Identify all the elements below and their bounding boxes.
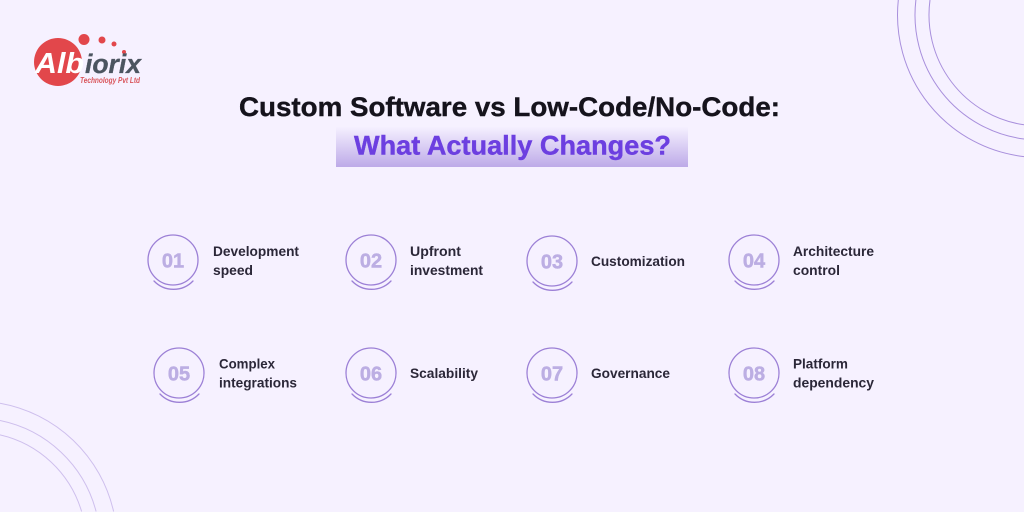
item 08: Platform dependency: dependency	[793, 374, 874, 390]
item 01: Development speed: 01	[162, 250, 184, 272]
decoration: top-right concentric arcs	[898, 0, 1024, 157]
item 07: Governance	[527, 348, 670, 402]
item 05: Complex integrations: integrations	[219, 374, 297, 390]
item 05: Complex integrations: 05	[168, 364, 190, 386]
item 03: Customization	[527, 236, 685, 290]
item 06: Scalability: 06	[360, 364, 382, 386]
item 01: Development speed	[148, 235, 299, 289]
subtitle banner	[336, 127, 688, 167]
item 03: Customization: 03	[541, 252, 563, 274]
item 02: Upfront investment: investment	[410, 262, 483, 278]
item 05: Complex integrations	[154, 348, 297, 402]
title: Custom Software vs Low-Code/No-Code:	[239, 92, 780, 122]
logo: Albiorix	[34, 34, 142, 86]
item 07: Governance: Governance	[591, 365, 670, 381]
logo: Albiorix: Technology Pvt Ltd	[80, 76, 141, 85]
item 03: Customization: Customization	[591, 253, 685, 269]
item 08: Platform dependency	[729, 348, 874, 402]
item 02: Upfront investment	[346, 235, 483, 289]
item 05: Complex integrations: Complex	[219, 356, 275, 372]
item 06: Scalability: Scalability	[410, 365, 478, 381]
logo: Albiorix: Alb	[34, 48, 84, 80]
item 04: Architecture control	[729, 235, 874, 289]
decoration: bottom-left concentric arcs	[0, 403, 114, 512]
item 04: Architecture control: control	[793, 262, 840, 278]
item 07: Governance: 07	[541, 364, 563, 386]
item 08: Platform dependency: 08	[743, 364, 765, 386]
subtitle banner: What Actually Changes?	[354, 130, 671, 160]
logo: Albiorix: iorix	[85, 49, 142, 79]
item 01: Development speed: Development	[213, 243, 299, 259]
item 08: Platform dependency: Platform	[793, 356, 848, 372]
item 04: Architecture control: Architecture	[793, 243, 874, 259]
item 02: Upfront investment: 02	[360, 250, 382, 272]
item 01: Development speed: speed	[213, 262, 253, 278]
item 06: Scalability	[346, 348, 478, 402]
item 02: Upfront investment: Upfront	[410, 243, 461, 259]
item 04: Architecture control: 04	[743, 250, 766, 272]
